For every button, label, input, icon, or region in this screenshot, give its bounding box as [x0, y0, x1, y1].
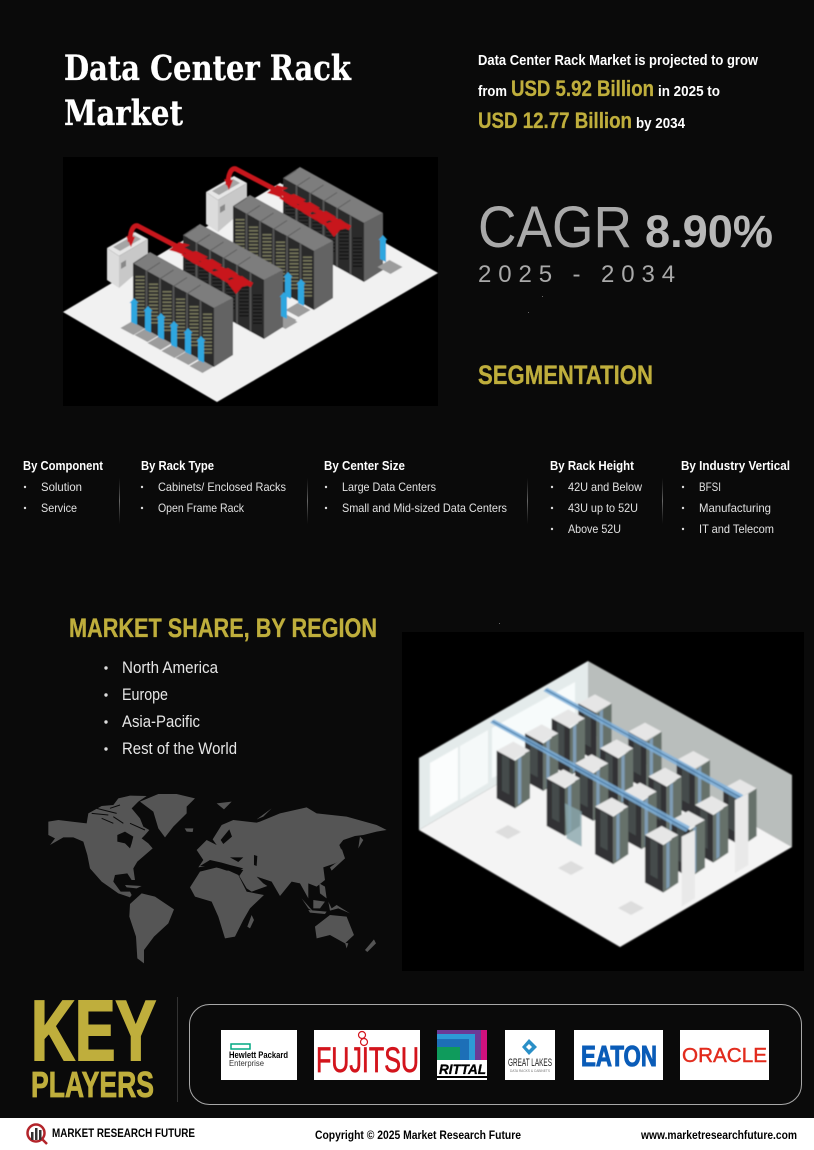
region list: Europe — [122, 685, 168, 704]
key players heading: PLAYERS — [31, 1064, 154, 1105]
segment: by rack height: 42U and Below — [568, 480, 642, 494]
market projection text: USD 5.92 Billion — [511, 76, 654, 101]
world map — [48, 794, 387, 963]
market projection text: in 2025 to — [658, 83, 720, 100]
segment: by rack height: By Rack Height — [550, 458, 635, 473]
segment: by center size: Large Data Centers — [342, 480, 436, 494]
logo panel — [190, 1004, 802, 1104]
segment: by rack height: Above 52U — [568, 522, 621, 536]
region list: North America — [122, 658, 218, 677]
segment: by rack type — [141, 458, 286, 515]
CAGR figure: CAGR — [478, 195, 632, 260]
segment: by component: Solution — [41, 480, 82, 494]
logo: Eaton — [574, 1030, 663, 1080]
forecast period: 2025 - 2034 — [478, 261, 682, 288]
segmentation heading: SEGMENTATION — [478, 360, 653, 390]
logo: Hewlett Packard Enterprise: Hewlett Packard — [229, 1050, 288, 1060]
logo: Fujitsu — [314, 1030, 420, 1080]
segment: by rack height — [550, 458, 642, 536]
footer logo: MARKET RESEARCH FUTURE — [52, 1126, 195, 1140]
logo: Hewlett Packard Enterprise: Enterprise — [229, 1058, 264, 1068]
logo: Eaton: EATON — [581, 1041, 657, 1073]
title: Data Center Rack — [64, 48, 352, 89]
key players heading — [31, 984, 156, 1105]
divider — [177, 997, 178, 1102]
market projection text: USD 12.77 Billion — [478, 108, 632, 133]
footer copyright: Copyright © 2025 Market Research Future — [315, 1128, 521, 1142]
title — [64, 48, 352, 134]
logo: Great Lakes: DATA RACKS & CABINETS — [510, 1068, 550, 1073]
logo: Rittal: RITTAL — [439, 1061, 486, 1077]
segment: by rack type: Cabinets/ Enclosed Racks — [158, 480, 286, 494]
region list: Asia-Pacific — [122, 712, 200, 731]
segment: by industry vertical: Manufacturing — [699, 501, 771, 515]
logo: Rittal — [437, 1030, 487, 1080]
segment: by industry vertical: BFSI — [699, 480, 721, 494]
illustration: data center aisles — [63, 157, 438, 406]
segment: by industry vertical: By Industry Vertical — [681, 458, 790, 473]
segment: by industry vertical: IT and Telecom — [699, 522, 774, 536]
segment: by component: Service — [41, 501, 77, 515]
segment: by rack type: Open Frame Rack — [158, 501, 245, 515]
segment: by component — [23, 458, 104, 515]
logo: Great Lakes — [505, 1030, 555, 1080]
segment: by center size: Small and Mid-sized Data Centers — [342, 501, 507, 515]
market projection text — [478, 52, 758, 133]
region list: Rest of the World — [122, 739, 237, 758]
logo: Hewlett Packard Enterprise — [221, 1030, 297, 1080]
logo: Fujitsu: FUJITSU — [316, 1041, 419, 1080]
tiny specks — [499, 296, 543, 624]
footer bar — [0, 1118, 814, 1150]
CAGR figure: 8.90% — [645, 206, 773, 257]
illustration: server room — [402, 632, 804, 971]
market projection text: from — [478, 83, 507, 100]
key players heading: KEY — [31, 984, 156, 1079]
segment: by center size: By Center Size — [324, 458, 405, 473]
segment: by component: By Component — [23, 458, 104, 473]
region list — [104, 658, 237, 758]
market projection text: by 2034 — [636, 115, 686, 132]
segment: by industry vertical — [681, 458, 790, 536]
market share heading: MARKET SHARE, BY REGION — [69, 613, 377, 643]
segment: by rack height: 43U up to 52U — [568, 501, 638, 515]
logo: Oracle — [680, 1030, 769, 1080]
segment: by rack type: By Rack Type — [141, 458, 214, 473]
footer logo — [28, 1124, 195, 1144]
segment dividers — [119, 478, 663, 524]
logo: Great Lakes: GREAT LAKES — [508, 1057, 552, 1069]
title: Market — [64, 93, 183, 134]
market projection text: Data Center Rack Market is projected to grow — [478, 52, 758, 69]
CAGR figure — [478, 195, 773, 260]
segment: by center size — [324, 458, 507, 515]
logo: Oracle: ORACLE — [682, 1045, 767, 1067]
